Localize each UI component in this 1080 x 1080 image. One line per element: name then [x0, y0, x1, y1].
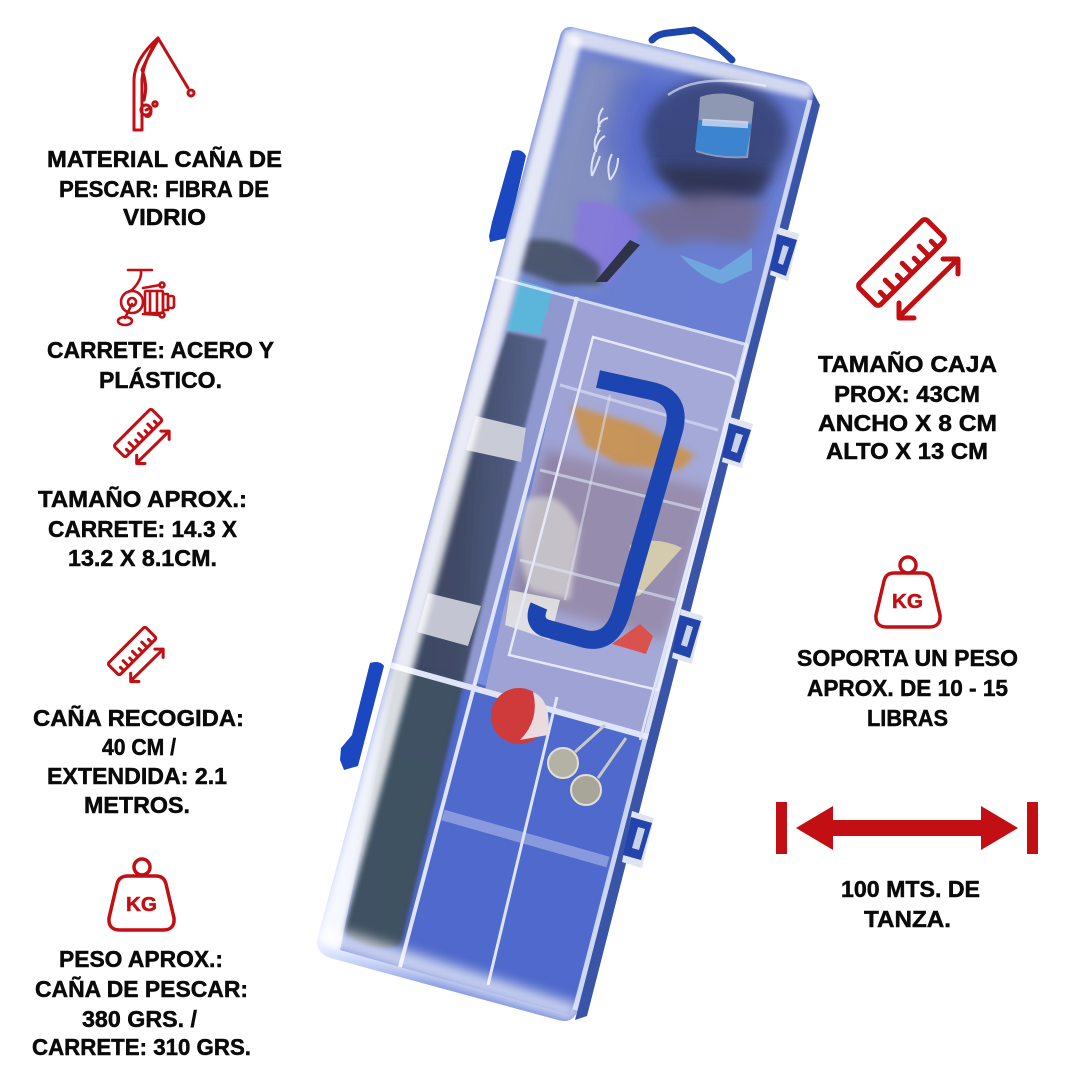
- text: material: VIDRIO: [123, 204, 206, 230]
- right item: line length: [776, 802, 1038, 932]
- bottom glow: [315, 925, 580, 1022]
- left latch lower: [340, 662, 384, 770]
- lower compartment blue: [340, 660, 650, 1015]
- text: line length: TANZA.: [864, 906, 951, 932]
- rod silver band 2: [417, 593, 481, 646]
- left item: reel size: [38, 409, 247, 571]
- sinker 1: [548, 748, 578, 778]
- icon: ruler small: [114, 409, 169, 464]
- right latch 4: [622, 811, 654, 868]
- icon: kg weight: [876, 557, 940, 627]
- red lure tip: [612, 624, 653, 654]
- box top handle: [652, 30, 732, 60]
- text: box size: ALTO X 13 CM: [826, 438, 988, 464]
- lavender strip beside the rod: [385, 280, 577, 688]
- brown tray interior: [510, 450, 712, 640]
- sinker 2: [571, 775, 601, 805]
- box body: [317, 27, 813, 1021]
- handle of the inner tray: [537, 379, 676, 640]
- text: line length: [841, 876, 980, 932]
- icon: ruler small: [108, 627, 163, 682]
- text: weight: [32, 946, 251, 1060]
- text: rod length: METROS.: [84, 792, 190, 818]
- dark blob: [518, 239, 600, 285]
- box back edge on the right: [575, 92, 820, 1020]
- hooks: [591, 108, 618, 180]
- rod cyan tip: [507, 280, 553, 335]
- text: load capacity: LIBRAS: [867, 705, 948, 731]
- right latch 2: [722, 417, 753, 468]
- text: box size: TAMAÑO CAJA: [818, 350, 997, 377]
- cream line coil: [519, 496, 580, 600]
- text: rod length: CAÑA RECOGIDA:: [33, 704, 244, 731]
- text: reel size: [38, 485, 247, 571]
- lid dark blue centre: [596, 68, 680, 194]
- sinkers: [548, 725, 626, 805]
- icon: kg weight: KG: [126, 894, 157, 916]
- lid grey reflection: [532, 60, 637, 290]
- icon: ruler large: [857, 218, 958, 318]
- text: material: MATERIAL CAÑA DE: [47, 145, 282, 172]
- text: weight: CARRETE: 310 GRS.: [32, 1034, 251, 1060]
- reel label text strip: [702, 119, 748, 128]
- orange lure: [570, 405, 695, 470]
- text: rod length: EXTENDIDA: 2.1: [47, 763, 227, 789]
- text: reel material: PLÁSTICO.: [99, 366, 222, 393]
- bobber red: [491, 688, 538, 744]
- text: rod length: [33, 704, 244, 818]
- left edge glow: [318, 28, 582, 950]
- text: box size: [818, 350, 997, 464]
- icon: reel: [118, 270, 174, 325]
- cream lure: [629, 540, 682, 596]
- brown patch: [630, 195, 765, 245]
- rod lower soft end: [345, 665, 462, 947]
- right rim highlight: [575, 100, 810, 1010]
- text: box size: PROX: 43CM: [834, 381, 980, 407]
- icon: kg weight: KG: [892, 591, 923, 613]
- left item: reel: [47, 270, 274, 393]
- text: reel size: 13.2 X 8.1CM.: [68, 545, 217, 571]
- dark strap: [595, 240, 640, 282]
- reel bail: [668, 81, 766, 95]
- text: weight: 380 GRS. /: [82, 1006, 198, 1032]
- text: material: PESCAR: FIBRA DE: [59, 176, 269, 202]
- left item: fishing rod material: [47, 38, 282, 230]
- text: line length: 100 MTS. DE: [841, 876, 980, 902]
- text: material: [47, 145, 282, 230]
- inner tray outline: [509, 337, 738, 690]
- text: box size: ANCHO X 8 CM: [818, 410, 997, 436]
- sinker lines: [575, 725, 626, 778]
- text: rod length: 40 CM /: [102, 734, 177, 760]
- rod: [345, 332, 547, 947]
- box contents: [315, 26, 815, 1022]
- text: weight: CAÑA DE PESCAR:: [35, 975, 248, 1002]
- white package: [505, 590, 560, 640]
- top rim glow: [570, 26, 815, 100]
- reel lower dark: [650, 165, 775, 210]
- left item: rod length: [33, 627, 244, 818]
- right latch 1: [770, 227, 799, 281]
- text: reel size: CARRETE: 14.3 X: [48, 516, 238, 542]
- right item: box size: [818, 218, 997, 464]
- text: load capacity: APROX. DE 10 - 15: [807, 675, 1008, 701]
- light blue bag: [680, 248, 752, 284]
- text: weight: PESO APROX.:: [59, 946, 223, 972]
- text: load capacity: [797, 645, 1018, 731]
- right latch 3: [672, 609, 703, 664]
- lid tint: [490, 30, 815, 345]
- icon: fishing rod: [134, 38, 194, 130]
- upper compartment lavender: [485, 300, 745, 735]
- bobber white stripe: [520, 692, 549, 740]
- product photo: tackle box: [315, 26, 820, 1022]
- purple patch: [572, 201, 644, 285]
- bobber: [491, 688, 549, 744]
- text: reel material: [47, 337, 274, 393]
- icon: double arrow with end bars: [776, 802, 1038, 854]
- reel spool: [696, 93, 754, 158]
- rod silver band 1: [466, 416, 526, 462]
- right item: load capacity: [797, 557, 1018, 731]
- text: reel material: CARRETE: ACERO Y: [47, 337, 274, 363]
- reel dark shadow: [644, 79, 788, 191]
- text: load capacity: SOPORTA UN PESO: [797, 645, 1018, 671]
- text: reel size: TAMAÑO APROX.:: [38, 485, 247, 512]
- left latch upper: [489, 150, 526, 242]
- left item: weight: [32, 859, 251, 1060]
- compartment dividers: [383, 277, 748, 985]
- icon: kg weight: [109, 859, 174, 930]
- reel blue label: [695, 120, 752, 156]
